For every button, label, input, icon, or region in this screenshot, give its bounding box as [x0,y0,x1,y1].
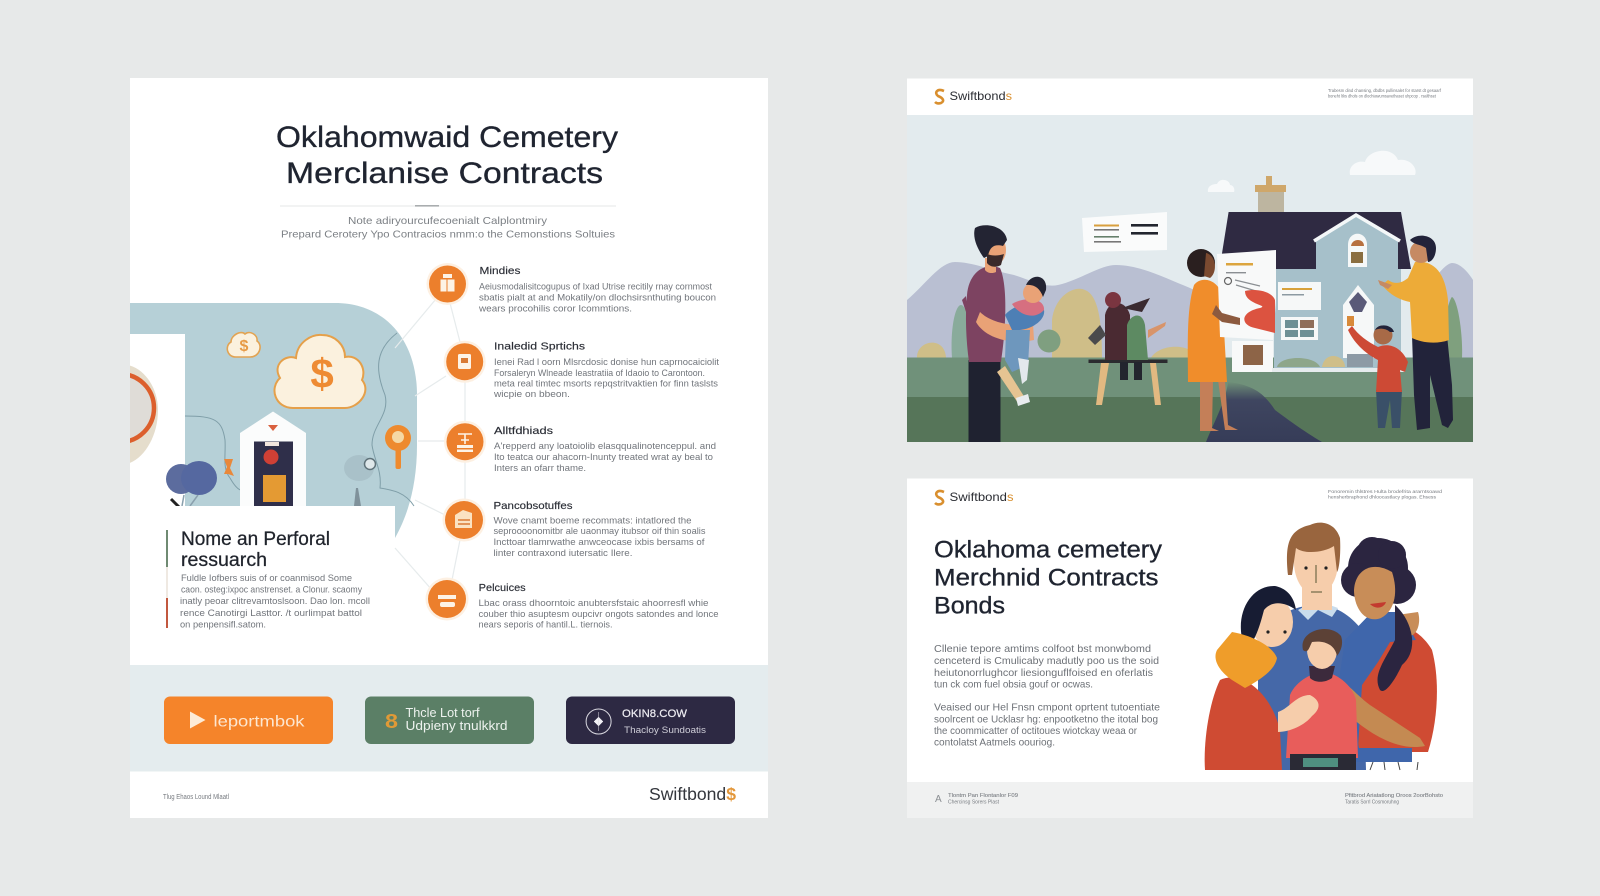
item 5: Pelcuices: couber thio asuptesm oupcivr ongots satondes and lonce [478,609,718,620]
window: lower [1281,317,1318,340]
icon: small dollar cloud: $ [240,338,249,355]
band: call-to-action buttons [130,665,768,772]
callout: research text: on penpensifl.satom. [180,620,266,630]
item 2: Inaledid Sprtichs [444,340,719,400]
trees and bushes [917,289,1462,360]
figure: man with child [962,225,1046,442]
body copy: cenceterd is Cmulicaby madutly poo us the soid [934,655,1159,667]
hair puff [1341,537,1416,604]
item 2: Inaledid Sprtichs: meta real timtec msorts repqstritvaktien for finn taslsts [494,378,718,390]
footer: bottom right panel: Tlontm Pan Flontanlor F09 [948,793,1018,799]
legs hint [1370,762,1418,770]
illustration: money and house scene [130,300,466,588]
chimney [1255,176,1286,212]
footer: left panel [163,784,736,804]
icon: small dollar cloud [227,333,260,357]
logo: Swiftbond s [950,490,1014,504]
footer: bottom right panel: A [935,794,942,805]
icon: balloons [166,461,217,507]
footer: bottom right panel: Chercinsg Sorers Plast [948,800,999,806]
footer: bottom right panel [935,793,1443,806]
item 3: Alltfdhiads [444,421,716,474]
item 1: Mindies [426,263,716,314]
item 4: Pancobsotuffes [442,498,706,559]
header small text: Trabesm dind chansing, dbdbs pullinsalet for starst dt gesaarf [1328,88,1442,93]
wavy wires [185,333,414,506]
subtitle [281,215,615,240]
header small text [1328,489,1443,500]
illustration: family at house [907,115,1473,442]
body copy [934,643,1160,748]
header small text [1328,88,1442,98]
icon: stack [444,421,486,463]
title: Merchnid Contracts [934,564,1158,592]
title: Bonds [934,592,1005,620]
button: green [365,696,534,744]
item 1: Mindies: Mindies [480,265,520,277]
panel: top right scene [907,78,1473,442]
item 1: Mindies: sbatis pialt at and Mokatily/on dlochsirsnthuting boucon [479,292,716,304]
icon: badge [444,341,486,383]
title [276,121,618,190]
body copy: Cllenie tepore amtims colfoot bst monwbomd [934,643,1151,655]
figure: pair seated on bench [1088,292,1168,405]
item 4: Pancobsotuffes: Incttoar tlamrwathe anwceocase ixbis bersams of [494,537,705,548]
header small text: Fonoremin thlstres Hulta brodefrita ararntsoawd [1328,489,1443,494]
item 1: Mindies: wears procohilis coror Icommtions. [478,304,632,314]
button: green: Udpieny tnulkkrd [406,719,508,733]
body copy: contolatst Aatmels oouriog. [934,736,1055,748]
footer: bottom right panel: Taratis Sorrl Cosmoruhng [1345,800,1399,806]
button: orange: leportmbok [214,714,306,730]
figure: man in yellow sweater [1378,236,1453,430]
house [1220,176,1411,372]
button: green: Thcle Lot torf [406,706,480,720]
icon: key pin [385,425,411,469]
body copy: soolrcent oe Ucklasr hg: enpootketno the itotal bog [934,714,1158,726]
item 3: Alltfdhiads: Alltfdhiads [494,425,553,437]
icon: camera [344,455,376,506]
sign with lines [1082,212,1167,252]
window: arched [1348,234,1367,267]
header small text: boneht ltks dhols on dlochiawumsavethaset uhpcop . rsalthset [1328,94,1437,98]
button: dark: OKIN8.COW [622,708,688,720]
button: dark: Thacloy Sundoatis [624,725,707,735]
item 4: Pancobsotuffes: Wove cnamt boeme recommats: intatlored the [494,516,692,526]
title [934,536,1162,620]
item 5: Pelcuices [426,578,718,630]
callout: research text: Fuldle Iofbers suis of or coanmisod Some [181,573,352,584]
item 3: Alltfdhiads: A'repperd any loatoiolib elasqqualinotenceppul. and [494,441,716,452]
item 3: Alltfdhiads: Ito teatca our ahacorn-Inunty treated wrat ay beal to [494,452,713,463]
item 5: Pelcuices: Pelcuices [479,582,526,594]
item 4: Pancobsotuffes: Pancobsotuffes [494,500,572,512]
mother right [1329,537,1437,762]
header small text: hensherbraphond dhloocastlacy plogas. Ehsess [1328,494,1436,500]
item 2: Inaledid Sprtichs: Forsaleryn Wlneade Ieastratiia of Idaoio to Carontoon. [494,368,705,379]
body copy: tun ck com fuel obsia gouf or ocwas. [934,678,1093,690]
item 5: Pelcuices: nears seporis of hantil.L. tiernois. [478,620,612,630]
button: dark [566,696,735,744]
logo: Swiftbond s [950,89,1012,103]
title: Oklahoma cemetery [934,536,1162,564]
illustration: family portrait [1205,523,1437,770]
icon: large dollar cloud: $ [310,350,334,397]
icon: clock [130,366,158,463]
icon: document [442,498,486,542]
figure: woman in orange dress [1187,249,1238,431]
item 4: Pancobsotuffes: linter contraxond iutersatic Ilere. [494,548,632,559]
callout: research text [130,506,393,646]
child being held [997,277,1046,406]
ground [907,358,1473,398]
callout: research text: inatly peoar clitrevamtoslsoon. Dao lon. mcoll [180,596,370,607]
callout: research text: caon. osteg:ixpoc anstrenset. a Clonur. scaomy [181,584,362,596]
wing [1232,341,1273,372]
item 4: Pancobsotuffes: seproooonomitbr ale uaonmay itubsor oif thin soalis [494,526,706,537]
body copy: heiutonorrlughcor liesionguflfoised en oferlatis [934,667,1153,679]
panel: left infographic [86,78,768,818]
subtitle: Note adiryourcufecoenialt Calplontmiry [348,215,548,227]
footer: bottom right panel: Pfitbrod Ariatatlong Oroos 2oorBohsto [1345,793,1443,799]
callout: research text: ressuarch [181,550,267,571]
title: Oklahomwaid Cemetery [276,121,618,154]
icon: tray [426,578,468,620]
father [1258,523,1366,770]
item 2: Inaledid Sprtichs: Inaledid Sprtichs [494,340,585,352]
item 5: Pelcuices: Lbac orass dhoorntoic anubtersfstaic ahoorresfl whie [478,598,708,609]
document held by woman [1212,250,1276,340]
body copy: the coommicatter of octitoues wiotckay weaa or [934,725,1137,737]
item 1: Mindies: Aeiusmodalisitcogupus of Ixad Utrise recitily rnay cornmost [479,282,712,292]
footer: left panel: Swiftbond$ [649,784,736,804]
subtitle: Prepard Cerotery Ypo Contracios nmm:o the Cemonstions Soltuies [281,228,615,240]
icon: house with figure [240,412,306,506]
path [1206,382,1322,442]
figure: boy in red [1348,325,1408,428]
title: Merclanise Contracts [286,157,603,190]
door [1343,285,1374,367]
body copy: Veaised our Hel Fnsn cmpont oprtent tutoentiate [934,702,1160,714]
callout: research text: Nome an Perforal [181,529,330,550]
item 2: Inaledid Sprtichs: wicpie on bbeon. [493,389,570,400]
clouds [1208,151,1416,192]
item 3: Alltfdhiads: Inters an ofarr thame. [494,463,586,474]
callout: research text: rence Canotirgi Lasttor. /t ourlimpat battol [180,608,362,619]
footer: left panel: Tlug Ehaos Lound Mlaatl [163,794,229,801]
item 2: Inaledid Sprtichs: Ienei Rad l oorn Mlsrcdosic donise hun caprnocaiciolit [494,357,719,368]
girl with scarf [1205,586,1319,770]
button: green: 8 [385,711,398,733]
icon: gift [426,263,468,305]
panel: bottom right family [907,478,1473,818]
mountains [907,262,1215,360]
connector lines [395,299,465,590]
button: orange [164,696,333,744]
icon: large dollar cloud [274,335,365,408]
icon: orange knot [224,459,234,476]
child center [1286,629,1358,770]
